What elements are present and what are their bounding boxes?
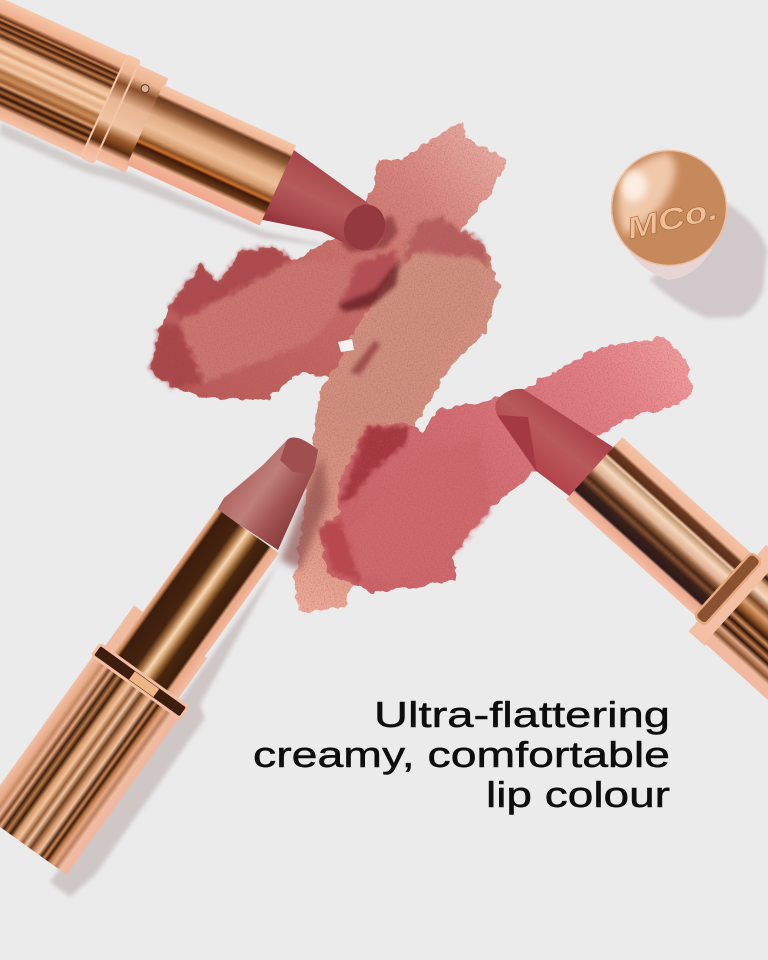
- collar: [688, 545, 768, 646]
- collar rivet: [140, 83, 150, 94]
- cap glint: [621, 170, 647, 202]
- ribbed base: [0, 653, 181, 875]
- bullet facet: [497, 415, 537, 472]
- ribbed base: [705, 560, 768, 757]
- swatch: centre nude smear: [294, 217, 500, 612]
- lipstick: bottom left: [0, 438, 318, 875]
- cap: [612, 150, 726, 280]
- gold sleeve: [566, 437, 757, 621]
- gold sleeve: [127, 85, 296, 225]
- headline: creamy, comfortable: [253, 734, 670, 775]
- gold sleeve: [111, 509, 279, 701]
- collar: [94, 64, 168, 173]
- headline: Ultra-flattering: [374, 694, 670, 735]
- bullet tip face: [337, 198, 392, 256]
- swatch: creases and gap: [338, 258, 400, 375]
- bullet: [217, 438, 318, 550]
- ring glint: [129, 671, 159, 697]
- lipstick: right: [495, 389, 768, 758]
- swatch: lower right pink smear: [320, 337, 692, 593]
- cap top: [612, 150, 726, 266]
- headline: [253, 694, 670, 815]
- collar ring: [92, 644, 188, 718]
- cap highlight: [618, 153, 675, 235]
- headline: lip colour: [486, 774, 670, 815]
- bullet: [495, 389, 613, 498]
- swatch: upper left smear: [150, 120, 507, 400]
- bullet tip face: [280, 438, 318, 473]
- collar ring: [81, 55, 140, 163]
- ribbed base: [0, 0, 129, 158]
- collar ring: [694, 552, 762, 625]
- bullet: [261, 150, 401, 269]
- shadows on swatches: [280, 215, 398, 570]
- cap logo: MCo.: [624, 193, 721, 246]
- collar: [102, 606, 207, 703]
- cap side: [613, 215, 725, 280]
- lipstick: top left: [0, 0, 408, 285]
